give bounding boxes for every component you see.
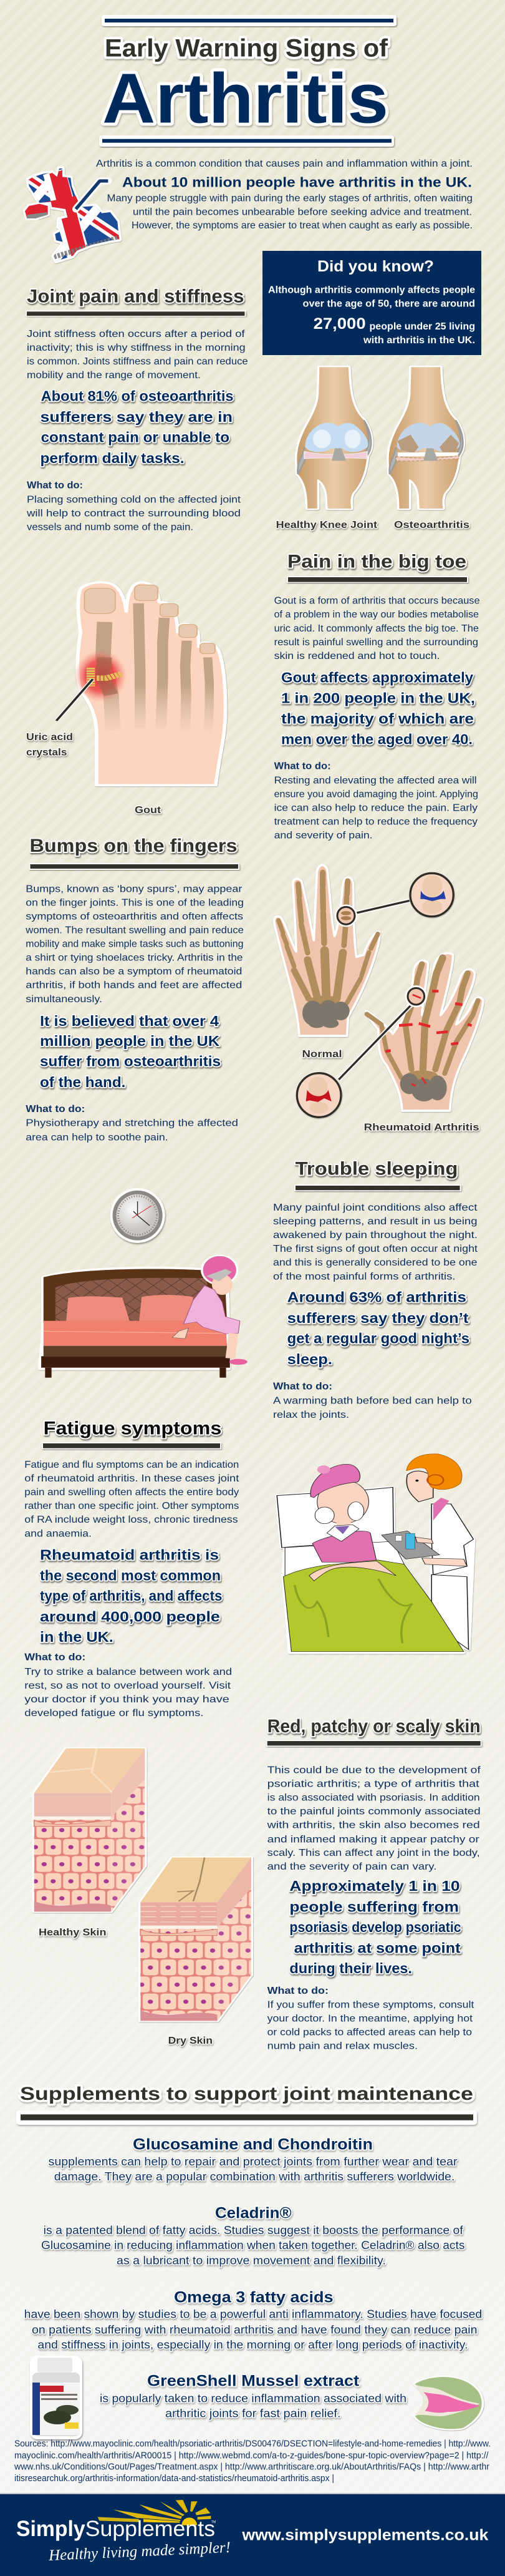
illustration: clock (110, 1188, 165, 1243)
what to do: area can help to soothe pain. (26, 1132, 168, 1143)
omega 3: Omega 3 fatty acids (174, 2288, 334, 2306)
callout: Rheumatoid arthritis is (40, 1546, 219, 1563)
glucosamine: damage. They are a popular combination with arthritis sufferers worldwide. (54, 2170, 454, 2183)
illustration: hands (274, 865, 483, 1133)
callout: people suffering from (289, 1898, 459, 1915)
body text: scaly. This can affect any joint in the body, (267, 1848, 480, 1858)
website: www.simplysupplements.co.uk (241, 2527, 488, 2544)
body text: with arthritis, the skin also becomes red (266, 1820, 480, 1830)
label: dry skin: Dry Skin (168, 2036, 213, 2046)
greenshell: GreenShell Mussel extract (147, 2372, 360, 2389)
body text: to the painful joints commonly associated (267, 1806, 481, 1817)
what to do: will help to contract the surrounding blood (26, 508, 241, 519)
illustration: healthy skin (34, 1749, 145, 1911)
icon: UK map with tick (23, 165, 125, 263)
what to do (26, 1104, 238, 1143)
glucosamine: supplements can help to repair and protect joints from further wear and tear (49, 2155, 458, 2168)
icon: supplement bottle (30, 2356, 82, 2439)
intro text: Many people struggle with pain during the early stages of arthritis, often waiting (107, 193, 473, 203)
panel: trouble sleeping (273, 1159, 478, 1420)
callout: during their lives. (289, 1960, 412, 1976)
body text: of a problem in the way our bodies metabolise (274, 609, 479, 620)
callout: Gout affects approximately (281, 669, 473, 685)
glucosamine: Glucosamine and Chondroitin (133, 2135, 373, 2153)
foot labels: crystals (26, 748, 67, 758)
illustration: dry skin (140, 1858, 251, 2021)
icon: green mussel (414, 2376, 483, 2430)
foot labels: Uric acid (26, 732, 73, 743)
heading: Red, patchy or scaly skin (267, 1716, 481, 1737)
callout: get a regular good night’s (287, 1330, 469, 1347)
callout: million people in the UK (40, 1033, 219, 1049)
heading: Trouble sleeping (296, 1159, 458, 1179)
body text (25, 884, 244, 1005)
body text: a shirt or tying shoelaces tricky. Arthritis in the (26, 952, 243, 963)
what to do: Try to strike a balance between work and (24, 1667, 232, 1677)
body text: uric acid. It commonly affects the big toe. The (274, 623, 479, 634)
intro text (96, 159, 473, 231)
body text: Joint stiffness often occurs after a period of (27, 329, 245, 339)
rheumatoid hand (366, 953, 483, 1111)
callout: sufferers say they are in (40, 409, 233, 425)
body text: Gout is a form of arthritis that occurs because (274, 595, 480, 606)
did you know text: with arthritis in the UK. (363, 335, 475, 346)
body text: Bumps, known as ‘bony spurs’, may appear (26, 884, 243, 894)
callout (40, 388, 234, 466)
celadrin (41, 2204, 464, 2267)
what to do: vessels and numb some of the pain. (27, 522, 193, 532)
body text (27, 329, 248, 381)
body text: of the most painful forms of arthritis. (273, 1272, 455, 1282)
panel: did you know (262, 251, 481, 355)
body text: hands can also be a symptom of rheumatoid (26, 966, 242, 977)
greenshell (100, 2372, 406, 2419)
sources: mayoclinic.com/health/arthritis/AR00015 | http://www.webmd.com/a-to-z-guides/bone-spur-topic-overview?page=2 | http:// (14, 2451, 489, 2461)
heading: Fatigue symptoms (44, 1418, 221, 1438)
omega 3: and stiffness in joints, especially in the morning or after long periods of inactivity. (37, 2338, 468, 2351)
heading: Supplements to support joint maintenance (20, 2084, 473, 2104)
did you know text: 27,000 (314, 315, 366, 333)
normal hand magnifier (337, 872, 454, 925)
callout: the second most common (40, 1568, 221, 1584)
sources: itisresearchuk.org/arthritis-information/data-and-statistics/rheumatoid-arthritis.aspx | (14, 2474, 334, 2484)
panel: bumps on the fingers (25, 836, 244, 1143)
body text: of rheumatoid arthritis. In these cases joint (24, 1473, 239, 1484)
title (99, 15, 397, 147)
callout: in the UK. (40, 1629, 113, 1645)
what to do (273, 1382, 472, 1420)
panel: joint pain and stiffness (26, 286, 248, 532)
callout: suffer from osteoarthritis (40, 1053, 221, 1070)
body text: Fatigue and flu symptoms can be an indication (24, 1460, 239, 1470)
what to do (267, 1986, 474, 2051)
heading: Pain in the big toe (287, 551, 466, 572)
nurse (406, 1454, 473, 1649)
logo wordmark (16, 2517, 216, 2541)
callout: sufferers say they don’t (287, 1310, 469, 1326)
sources: Sources: http://www.mayoclinic.com/health/psoriatic-arthritis/DS00476/DSECTION=lifestyle-and-home-remedies | http://www. (14, 2439, 491, 2449)
tagline: Healthy living made simpler! (48, 2539, 231, 2564)
what to do: What to do: (273, 1382, 332, 1392)
body text (274, 595, 480, 661)
celadrin: as a lubricant to improve movement and flexibility. (117, 2255, 386, 2267)
sources (14, 2439, 491, 2484)
what to do: What to do: (267, 1986, 329, 1996)
callout (40, 1546, 222, 1645)
body text: psoriatic arthritis; a type of arthritis that (267, 1778, 479, 1789)
greenshell: is popularly taken to reduce inflammation associated with (100, 2392, 406, 2404)
what to do (274, 761, 478, 841)
what to do: What to do: (24, 1652, 85, 1663)
callout: type of arthritis, and affects (40, 1588, 222, 1604)
what to do: numb pain and relax muscles. (267, 2041, 418, 2051)
body text: is also associated with psoriasis. In addition (267, 1792, 480, 1803)
intro text: Arthritis is a common condition that causes pain and inflammation within a joint. (96, 159, 473, 169)
logo wordmark: Simply (16, 2517, 85, 2541)
knee labels: Healthy Knee Joint (276, 520, 378, 530)
what to do: your doctor if you think you may have (24, 1694, 229, 1705)
what to do: relax the joints. (273, 1410, 349, 1420)
body text: and anaemia. (24, 1529, 92, 1539)
callout: About 81% of osteoarthritis (41, 388, 234, 404)
what to do: What to do: (26, 1104, 85, 1115)
body text: awakened by pain throughout the night. (273, 1230, 478, 1241)
body text: rather than one specific joint. Other symptoms (24, 1501, 239, 1511)
body text: symptoms of osteoarthritis and often affects (26, 911, 243, 922)
callout (287, 1289, 469, 1367)
body text: sleeping patterns, and result in us being (273, 1216, 478, 1227)
footer (0, 2494, 505, 2576)
title top bar (102, 15, 397, 26)
panel: red, patchy or scaly skin (266, 1716, 481, 2051)
body text: mobility and the range of movement. (27, 370, 201, 381)
body text: skin is reddened and hot to touch. (274, 651, 440, 661)
what to do: treatment can help to reduce the frequency (274, 816, 478, 827)
callout (289, 1878, 461, 1976)
body text: This could be due to the development of (267, 1765, 481, 1775)
logo wordmark: TM (211, 2520, 216, 2524)
normal label: Normal (302, 1049, 342, 1060)
what to do: or cold packs to affected areas can help to (267, 2027, 472, 2037)
greenshell: arthritic joints for fast pain relief. (165, 2407, 340, 2419)
label: healthy skin: Healthy Skin (39, 1928, 106, 1938)
body text (24, 1460, 239, 1539)
body text: result is painful swelling and the surrounding (274, 637, 478, 648)
intro text: About 10 million people have arthritis in the UK. (122, 174, 472, 190)
body text: arthritis, if both hands and feet are affected (26, 980, 242, 990)
what to do: If you suffer from these symptoms, consult (267, 1999, 474, 2010)
omega 3: on patients suffering with rheumatoid arthritis and have found they can reduce pain (32, 2323, 477, 2336)
panel: pain in the big toe (274, 551, 480, 841)
callout: around 400,000 people (40, 1608, 220, 1624)
what to do: A warming bath before bed can help to (273, 1395, 472, 1406)
callout: perform daily tasks. (40, 450, 185, 466)
body text: women. The resultant swelling and pain reduce (25, 925, 244, 935)
did you know text (268, 285, 475, 346)
what to do: What to do: (27, 481, 83, 491)
knee labels (276, 520, 469, 530)
did you know text: over the age of 50, there are around (303, 298, 475, 309)
intro text: However, the symptoms are easier to treat when caught as early as possible. (132, 220, 473, 231)
celadrin: is a patented blend of fatty acids. Studies suggest it boosts the performance of (44, 2224, 464, 2237)
healthy knee (297, 367, 371, 509)
what to do: What to do: (274, 761, 331, 772)
body text (266, 1765, 481, 1872)
body text: inactivity; this is why stiffness in the morning (27, 343, 246, 353)
callout (281, 669, 475, 748)
what to do: your doctor. In the meantime, applying hot (267, 2013, 473, 2024)
callout: arthritis at some point (294, 1939, 461, 1956)
body text: and this is generally considered to be one (273, 1257, 478, 1268)
callout: 1 in 200 people in the UK, (281, 690, 475, 706)
did you know text: people under 25 living (369, 321, 475, 332)
body text: of RA include weight loss, chronic tiredness (24, 1515, 238, 1525)
what to do: Placing something cold on the affected joint (27, 494, 241, 505)
body text: Many painful joint conditions also affect (273, 1203, 478, 1213)
callout: psoriasis develop psoriatic (289, 1919, 461, 1935)
sources: www.nhs.uk/Conditions/Gout/Pages/Treatment.aspx | http://www.arthritiscare.org.uk/AboutArthritis/FAQs | http://www.arthr (14, 2462, 489, 2472)
body text (273, 1203, 478, 1282)
illustration: gout foot (26, 582, 226, 816)
title line 1: Early Warning Signs of (105, 35, 388, 62)
body text: pain and swelling often affects the entire body (24, 1487, 239, 1498)
callout (40, 1013, 221, 1090)
callout: sleep. (287, 1351, 332, 1367)
blanket (284, 1560, 464, 1652)
body text: and the severity of pain can vary. (267, 1861, 436, 1872)
illustration: knee joints (276, 367, 469, 530)
tray and glasses (382, 1531, 467, 1566)
celadrin: Celadrin® (215, 2204, 292, 2222)
foot labels (26, 732, 161, 816)
title bottom bar (99, 135, 394, 147)
callout: men over the aged over 40. (281, 731, 473, 748)
woman (172, 1256, 248, 1365)
what to do: rest, so as not to overload yourself. Visit (24, 1681, 231, 1691)
what to do (24, 1652, 232, 1719)
rheumatoid magnifier (296, 987, 425, 1118)
logo sun (98, 2500, 211, 2525)
knee labels: Osteoarthritis (394, 520, 469, 530)
did you know text: Although arthritis commonly affects people (268, 285, 475, 295)
what to do (26, 481, 241, 532)
celadrin: Glucosamine in reducing inflammation when taken together. Celadrin® also acts (41, 2239, 464, 2252)
callout: of the hand. (40, 1074, 125, 1090)
title line 2: Arthritis (102, 59, 388, 138)
did you know heading: Did you know? (317, 258, 434, 275)
omega 3: have been shown by studies to be a powerful anti inflammatory. Studies have focused (24, 2308, 482, 2320)
illustration: bed and woman (41, 1256, 248, 1378)
logo wordmark: Supplements (85, 2517, 215, 2541)
glucosamine (49, 2135, 458, 2183)
callout: Around 63% of arthritis (287, 1289, 466, 1305)
osteoarthritis knee (389, 367, 463, 509)
panel: supplements (16, 2084, 482, 2419)
body text: on the finger joints. This is one of the leading (26, 897, 244, 908)
heading: Bumps on the fingers (30, 836, 238, 856)
panel: fatigue symptoms (24, 1418, 239, 1719)
illustration: patient and nurse (277, 1454, 473, 1652)
callout: constant pain or unable to (41, 429, 229, 446)
pillow and patient (277, 1464, 404, 1577)
callout: the majority of which are (281, 710, 474, 726)
body text: The first signs of gout often occur at night (273, 1244, 478, 1254)
what to do: Resting and elevating the affected area will (274, 775, 477, 786)
body text: is common. Joints stiffness and pain can reduce (27, 356, 248, 367)
what to do: developed fatigue or flu symptoms. (24, 1708, 203, 1719)
body text: mobility and make simple tasks such as buttoning (26, 939, 244, 949)
what to do: and severity of pain. (274, 830, 373, 841)
rheumatoid label: Rheumatoid Arthritis (364, 1122, 479, 1133)
heading: Joint pain and stiffness (27, 286, 244, 306)
normal hand (274, 865, 380, 1036)
intro text: until the pain becomes unbearable before seeking advice and treatment. (133, 207, 472, 217)
what to do: ensure you avoid damaging the joint. Applying (274, 789, 478, 799)
what to do: Physiotherapy and stretching the affected (26, 1118, 238, 1128)
what to do: ice can also help to reduce the pain. Early (274, 803, 478, 813)
callout: Approximately 1 in 10 (289, 1878, 460, 1894)
omega 3 (24, 2288, 482, 2351)
callout: It is believed that over 4 (40, 1013, 219, 1029)
body text: and inflamed making it appear patchy or (267, 1834, 480, 1845)
foot labels: Gout (135, 805, 161, 816)
body text: simultaneously. (26, 994, 102, 1005)
